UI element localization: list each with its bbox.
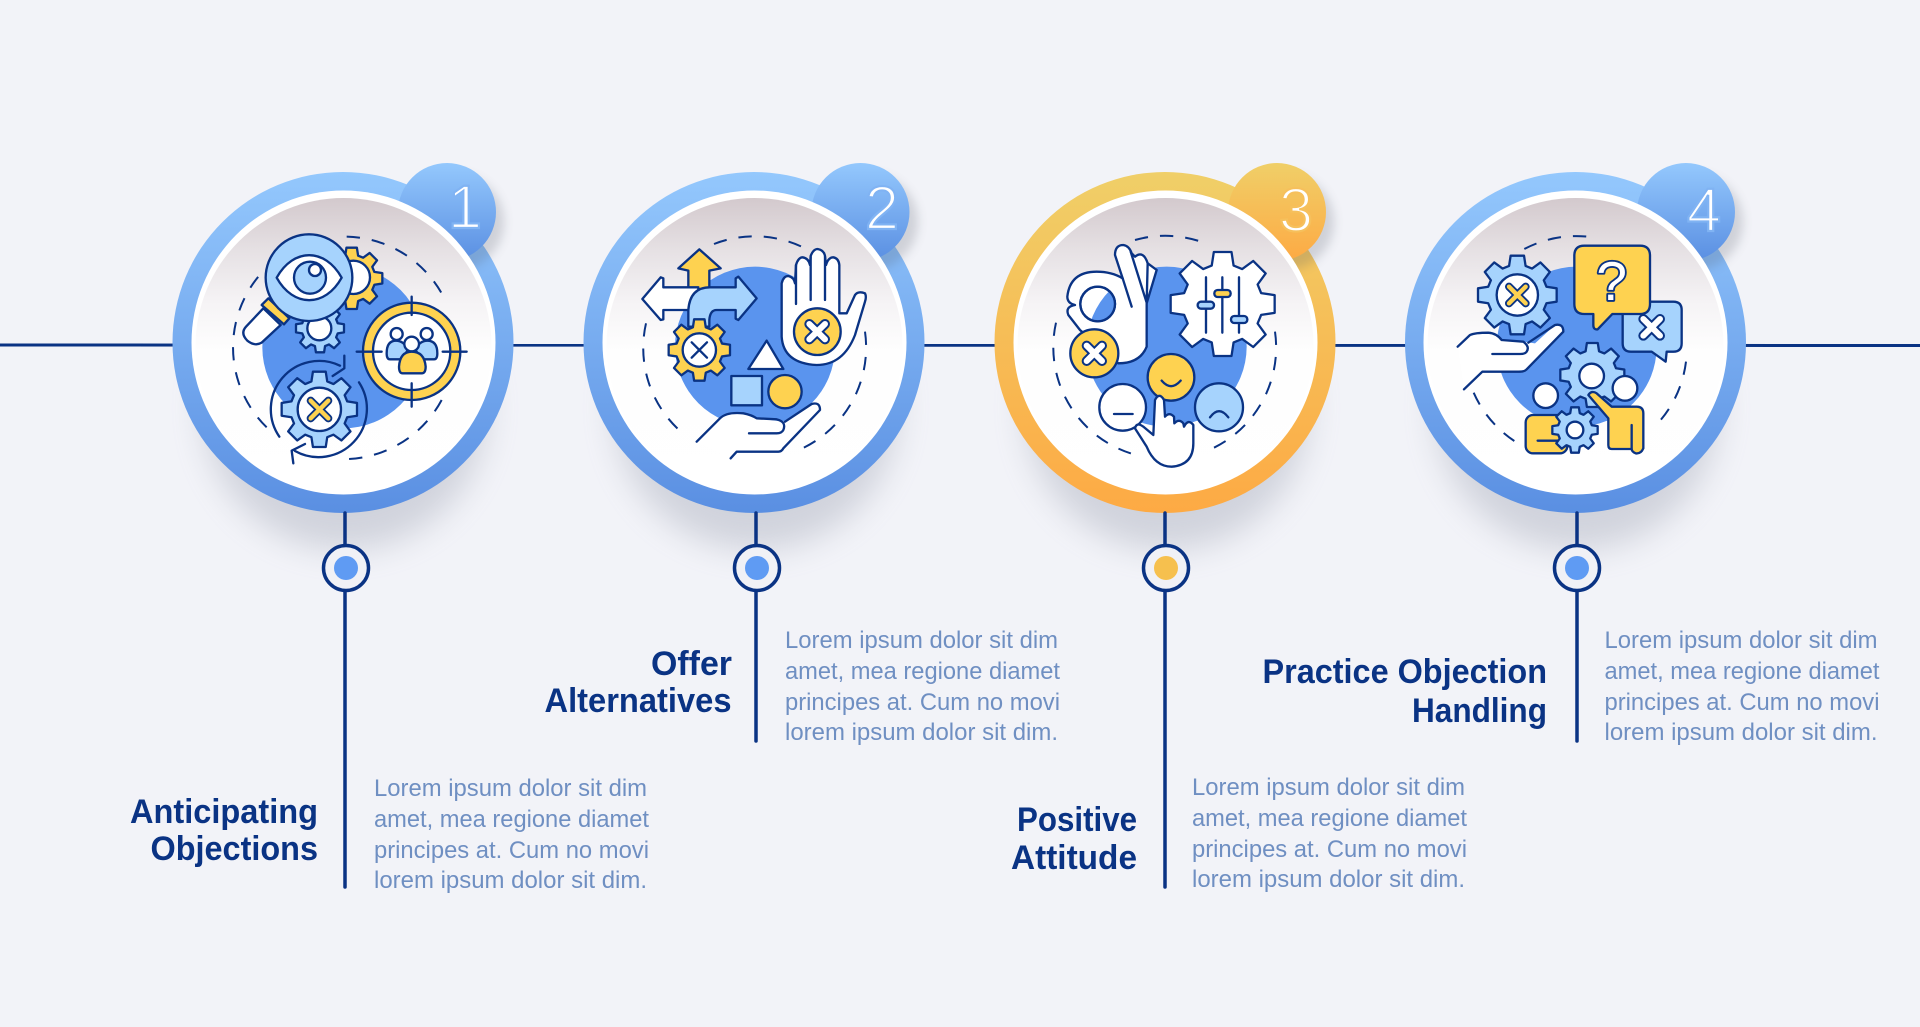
body text 4: principes at. Cum no movi	[1604, 689, 1880, 716]
ring and number badge 1: 1	[448, 173, 482, 241]
body text 1	[374, 775, 649, 894]
ring and number badge 3: 3	[1279, 176, 1313, 244]
ring and number badge 2: 2	[865, 174, 899, 242]
heading 1: Objections	[150, 830, 318, 868]
body text 1: Lorem ipsum dolor sit dim	[374, 775, 647, 802]
heading 1	[130, 793, 318, 868]
icon: practice objection handling	[1458, 236, 1686, 453]
heading 3: Attitude	[1011, 839, 1137, 877]
ring and number badge 4	[1405, 163, 1746, 513]
body text 1: lorem ipsum dolor sit dim.	[374, 867, 647, 894]
heading 3: Positive	[1017, 801, 1137, 839]
step 3 panel	[994, 163, 1467, 893]
connector and node 2	[734, 513, 780, 741]
infographic canvas	[0, 163, 1920, 893]
body text 3: lorem ipsum dolor sit dim.	[1192, 866, 1465, 893]
body text 3: Lorem ipsum dolor sit dim	[1192, 774, 1465, 801]
ring and number badge 2	[584, 163, 924, 513]
heading 3	[1011, 801, 1137, 877]
icon: offer alternatives	[642, 236, 866, 458]
body text 3: amet, mea regione diamet	[1192, 805, 1467, 832]
icon: positive attitude	[1053, 236, 1276, 467]
body text 2: lorem ipsum dolor sit dim.	[785, 719, 1058, 746]
heading 2	[544, 645, 732, 720]
body text 4: amet, mea regione diamet	[1604, 658, 1880, 685]
heading 4	[1262, 653, 1547, 730]
heading 2: Offer	[651, 645, 732, 683]
connector and node 4	[1554, 513, 1600, 741]
ring and number badge 4: 4	[1687, 176, 1721, 244]
heading 1: Anticipating	[130, 793, 318, 831]
ring and number badge 1	[172, 163, 514, 513]
body text 3	[1192, 774, 1467, 893]
step 4 panel	[1262, 163, 1880, 746]
horizontal timeline	[0, 344, 1920, 347]
body text 1: principes at. Cum no movi	[374, 837, 649, 864]
connector and node 1	[324, 513, 368, 887]
body text 2: principes at. Cum no movi	[785, 689, 1060, 716]
body text 1: amet, mea regione diamet	[374, 806, 649, 833]
body text 2	[785, 627, 1060, 746]
heading 4: Practice Objection	[1262, 653, 1547, 691]
body text 2: amet, mea regione diamet	[785, 658, 1060, 685]
body text 3: principes at. Cum no movi	[1192, 836, 1467, 863]
heading 2: Alternatives	[544, 682, 732, 720]
icon: practice objection handling: ?	[1596, 250, 1627, 312]
connector and node 3	[1144, 513, 1188, 887]
icon: anticipating objections	[233, 234, 467, 463]
body text 4	[1604, 627, 1880, 746]
body text 4: lorem ipsum dolor sit dim.	[1604, 719, 1878, 746]
heading 4: Handling	[1412, 692, 1547, 730]
body text 4: Lorem ipsum dolor sit dim	[1604, 627, 1878, 654]
step 2 panel	[544, 163, 1060, 746]
ring and number badge 3	[994, 163, 1336, 513]
body text 2: Lorem ipsum dolor sit dim	[785, 627, 1058, 654]
circle drop shadows	[203, 266, 1719, 550]
step 1 panel	[130, 163, 649, 894]
